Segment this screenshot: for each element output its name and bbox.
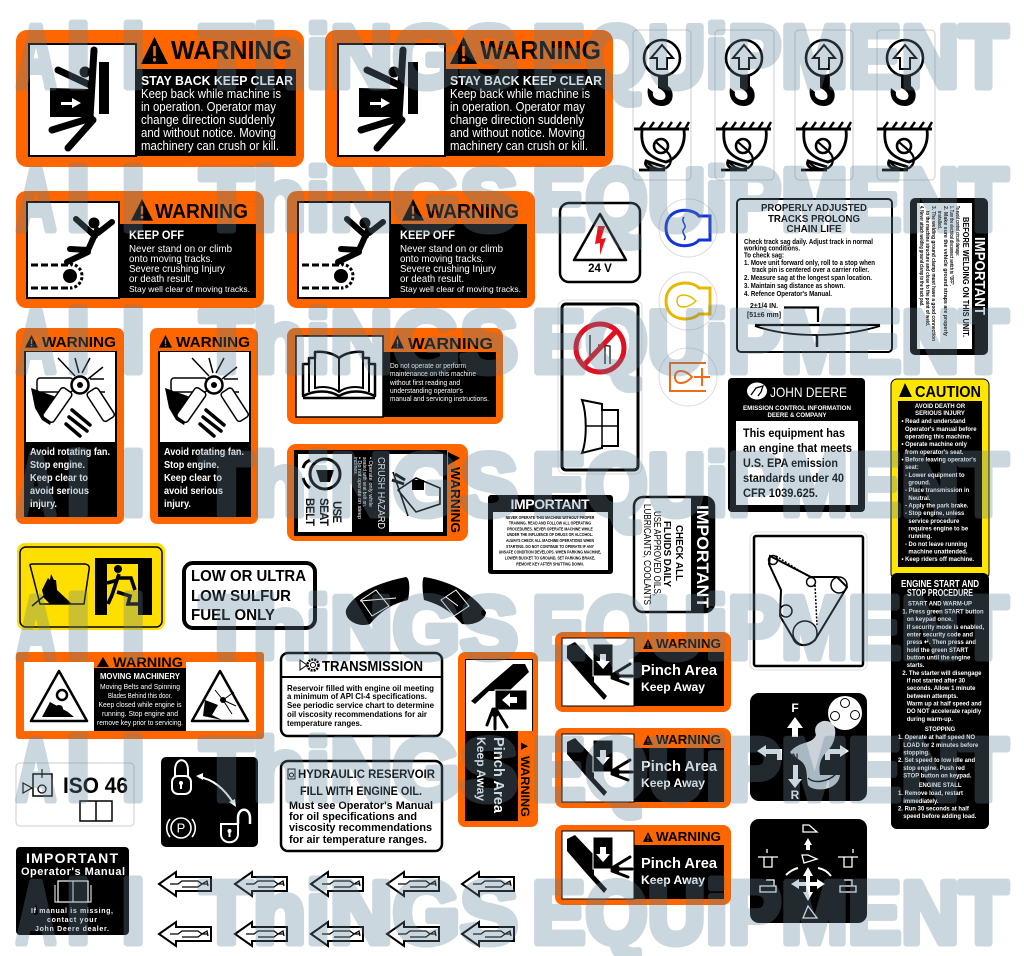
- decal: John Deere emission: EMISSION CONTROL INFORMATION: [743, 405, 851, 412]
- decal: track chain life: TRACKS PROLONG: [768, 213, 860, 225]
- decal: hydraulic reservoir: FILL WITH ENGINE OIL.: [300, 786, 422, 798]
- decal: track chain life: CHAIN LIFE: [786, 223, 842, 235]
- decal: caution panel and engine start procedure: 1. Operate at half speed NO: [898, 734, 975, 741]
- decal: stay back warning 2: and without notice. Moving: [450, 126, 585, 140]
- decal: stay back warning 2: STAY BACK KEEP CLEAR: [450, 73, 603, 88]
- decal: caution panel and engine start procedure: hold the green START: [907, 647, 968, 654]
- decal: stay back warning 2: change direction suddenly: [450, 113, 585, 127]
- decal: rotating fan warning 2: avoid serious: [164, 485, 223, 497]
- decal: stay back warning 1: machinery can crush or kill.: [141, 139, 279, 153]
- decal: pinch warning vertical: Pinch Area: [490, 737, 506, 814]
- decal: crush hazard seat belt warning: inclines.: [352, 457, 358, 475]
- decal: important operating instructions: [488, 495, 613, 574]
- decal: stay back warning 1: WARNING: [171, 35, 292, 65]
- decal: moving machinery warning: Blades Behind this door.: [108, 691, 172, 700]
- decal: caution panel and engine start procedure: ENGINE STALL: [919, 782, 962, 789]
- decal: caution panel and engine start procedure: SERIOUS INJURY: [915, 410, 966, 417]
- decal: crush hazard seat belt warning: • Operate only while: [367, 457, 373, 507]
- decal: caution panel and engine start procedure: • Operate machine only: [901, 441, 967, 448]
- decal: caution panel and engine start procedure: stop engine. Push red: [903, 765, 965, 772]
- decal: important operator's manual: [16, 847, 129, 935]
- decal: lock and park icons: P: [177, 820, 185, 836]
- decals: hook and knot stickers: [633, 30, 935, 180]
- decal: keep off warning 1: [16, 191, 264, 308]
- decal: caution panel and engine start procedure: STOPPING: [925, 726, 955, 733]
- decal: moving machinery warning: remove key prior to servicing.: [97, 718, 183, 727]
- decal: track chain life: working conditions.: [743, 244, 800, 252]
- decal: lock and park icons: [161, 757, 258, 847]
- decal: read manual warning: WARNING: [408, 336, 493, 353]
- decal: joystick pattern: F: [791, 701, 799, 715]
- decal: important operating instructions: UNDER THE INFLUENCE OF DRUGS OR ALCOHOL.: [507, 531, 593, 537]
- decal: read manual warning: maintenance on this machine: [390, 369, 476, 378]
- decal: keep off warning 1: or death result.: [129, 273, 193, 285]
- decal: caution panel and engine start procedure: requires engine to be: [908, 525, 969, 533]
- decal: caution panel and engine start procedure: machine unattended.: [908, 548, 968, 556]
- decal: read manual warning: Do not operate or perform: [390, 361, 466, 370]
- decal: caution panel and engine start procedure: speed before adding load.: [903, 813, 977, 820]
- decal: caution panel and engine start procedure: immediately.: [903, 798, 939, 805]
- decal: 24 V electrical hazard: [560, 203, 640, 282]
- decal: caution panel and engine start procedure: AVOID DEATH OR: [915, 403, 966, 410]
- decal: yellow emergency exit: [17, 543, 165, 630]
- decal: crush hazard seat belt warning: BELT: [303, 498, 315, 526]
- decal: read manual warning: understanding operator's: [390, 386, 463, 395]
- decal: pinch warning 3: WARNING: [656, 829, 721, 844]
- decal: caution panel and engine start procedure: - Apply the park brake.: [905, 502, 969, 510]
- decal: keep off warning 1: onto moving tracks.: [129, 253, 213, 265]
- decal: ISO 46: ISO 46: [63, 773, 128, 798]
- decal: track chain life: [737, 199, 892, 352]
- decal: track chain life: 2. Measure sag at the longest span location.: [744, 273, 872, 282]
- decal: caution panel and engine start procedure: running.: [908, 533, 932, 540]
- decal: keep off warning 2: [287, 191, 535, 308]
- decal: important operating instructions: STARTING. DO NOT CONTINUE TO OPERATE IF ANY: [506, 543, 594, 549]
- decal: John Deere emission: DEERE & COMPANY: [768, 412, 827, 419]
- decal: hydraulic reservoir: HYDRAULIC RESERVOIR: [298, 767, 435, 781]
- decal: caution panel and engine start procedure: if not started after 30: [907, 677, 966, 685]
- decal: pinch warning 1: Keep Away: [641, 680, 705, 694]
- decal: caution panel and engine start procedure: If security mode is enabled,: [907, 624, 984, 631]
- decal: crush hazard seat belt warning: CRUSH HAZARD: [375, 457, 386, 529]
- decal: keep off warning 2: onto moving tracks.: [400, 253, 484, 265]
- decal: stay back warning 1: Keep back while machine is: [141, 87, 281, 101]
- decal: keep off warning 1: Never stand on or climb: [129, 243, 232, 255]
- decal: caution panel and engine start procedure: [891, 379, 989, 829]
- decal: caution panel and engine start procedure: on keypad once.: [907, 616, 953, 623]
- decal: stay back warning 2: Keep back while machine is: [450, 87, 590, 101]
- decal: low sulfur fuel: LOW OR ULTRA: [191, 568, 306, 585]
- decal: caution panel and engine start procedure: CAUTION: [915, 384, 981, 401]
- decal: read manual warning: [287, 328, 503, 424]
- decal: caution panel and engine start procedure: operating this machine.: [905, 433, 971, 441]
- decal: important operator's manual: If manual is missing,: [31, 908, 113, 915]
- decal: stay back warning 1: change direction suddenly: [141, 113, 276, 127]
- decal: keep off warning 2: KEEP OFF: [400, 230, 455, 242]
- decal: track chain life: 4. Refence Operator's Manual.: [744, 289, 832, 298]
- decal: important operating instructions: PROCEDURES. NEVER OPERATE MACHINE WHILE: [507, 526, 593, 532]
- decal: caution panel and engine start procedure: stopping.: [903, 749, 930, 757]
- decal: pinch warning 1: [555, 632, 731, 712]
- decal: belt routing: [750, 532, 867, 670]
- decal: track chain life: track pin is centered over a carrier roller.: [752, 265, 869, 274]
- decal: joystick pattern: N: [792, 752, 798, 762]
- decal: rotating fan warning 1: [16, 328, 124, 524]
- decal: caution panel and engine start procedure: press ↵. Then press and: [907, 639, 976, 646]
- decal: important operating instructions: REMOVE KEY AFTER SHUTTING DOWN.: [516, 561, 584, 567]
- decal: caution panel and engine start procedure: 1. Remove load, restart: [898, 790, 964, 797]
- decal: low sulfur fuel: LOW SULFUR: [191, 588, 291, 605]
- decal: stay back warning 1: in operation. Operator may: [141, 100, 277, 114]
- decal: caution panel and engine start procedure: seat:: [905, 464, 919, 471]
- decal: important operator's manual: IMPORTANT: [26, 850, 118, 866]
- decal: John Deere emission: an engine that meets: [743, 443, 852, 455]
- decal: hydraulic reservoir: viscosity recommendations: [289, 822, 432, 834]
- icon: yellow bulb: [659, 272, 717, 330]
- decal: important operator's manual: John Deere dealer.: [35, 926, 109, 933]
- decal: caution panel and engine start procedure: - Do not leave running: [905, 541, 967, 548]
- decal: rotating fan warning 2: Avoid rotating fan.: [164, 446, 244, 458]
- decal: John Deere emission: CFR 1039.625.: [743, 488, 818, 500]
- decal: important operating instructions: NEVER OPERATE THIS MACHINE WITHOUT PROPER: [506, 514, 594, 520]
- decal: caution panel and engine start procedure: during warm-up.: [907, 716, 953, 723]
- decal: pinch warning vertical: Keep Away: [474, 737, 488, 801]
- decal: ISO 46: [16, 763, 134, 826]
- decal: caution panel and engine start procedure: from operator's seat.: [905, 449, 964, 456]
- decal: caution panel and engine start procedure: 1. Press green START button: [902, 608, 984, 616]
- decal: keep off warning 2: Stay well clear of moving tracks.: [400, 284, 521, 294]
- decal: pinch warning 1: WARNING: [656, 636, 721, 651]
- icon: orange glow plug: [659, 348, 717, 406]
- decal: crush hazard seat belt warning: USE: [330, 501, 342, 523]
- decal: before welding important: 3. The welding ground clamp must have a good connection: [930, 206, 936, 342]
- decal: read manual warning: manual and servicing instructions.: [390, 394, 489, 403]
- decal: check all fluids: [634, 497, 714, 612]
- decal: track chain life: [51±6 mm]: [747, 310, 781, 319]
- decal: keep off warning 2: Never stand on or climb: [400, 243, 503, 255]
- decal: pinch warning 3: Keep Away: [641, 873, 705, 887]
- decal: transmission: [281, 653, 442, 736]
- decal: stay back warning 2: in operation. Operator may: [450, 100, 586, 114]
- decal: transmission: TRANSMISSION: [322, 658, 423, 675]
- decal: check all fluids: IMPORTANT: [693, 505, 711, 608]
- decal: crush hazard seat belt warning: • Do not operate on steep: [356, 457, 362, 519]
- decal: moving machinery warning: WARNING: [113, 655, 183, 670]
- decal: rotating fan warning 1: WARNING: [42, 335, 116, 351]
- decal: stay back warning 1: STAY BACK KEEP CLEAR: [141, 73, 294, 88]
- decal: moving machinery warning: Moving Belts and Spinning: [100, 682, 180, 691]
- decal: track chain life: PROPERLY ADJUSTED: [761, 202, 867, 214]
- decal: keep off warning 2: Severe crushing Injury: [400, 263, 497, 275]
- decal: keep off warning 1: Stay well clear of moving tracks.: [129, 284, 250, 294]
- decal: transmission: Reservoir filled with engine oil meeting: [287, 684, 434, 693]
- decal: check all fluids: FLUIDS DAILY: [661, 521, 673, 587]
- decal: caution panel and engine start procedure: • Read and understand: [901, 418, 966, 425]
- decal: keep off warning 2: or death result.: [400, 273, 464, 285]
- decal: pinch warning 3: Pinch Area: [641, 855, 718, 872]
- decal: caution panel and engine start procedure: ground.: [908, 479, 931, 487]
- decal: pinch warning 2: [555, 728, 731, 808]
- icon: curved switch decals: [346, 577, 486, 625]
- decal: track chain life: Check track sag daily. Adjust track in normal: [744, 237, 873, 246]
- decal: caution panel and engine start procedure: STOP PROCEDURE: [907, 588, 973, 599]
- decal: moving machinery warning: [16, 652, 264, 739]
- decal: before welding important: to the machine structure and close to the point of weld.: [924, 211, 930, 326]
- decal: pinch warning vertical: ▲ WARNING: [518, 740, 532, 817]
- decal: moving machinery warning: MOVING MACHINERY: [100, 672, 181, 681]
- decal: stay back warning 2: WARNING: [480, 35, 601, 65]
- decal: stay back warning 1: and without notice. Moving: [141, 126, 276, 140]
- decal: pinch warning vertical: [458, 652, 538, 827]
- decal: keep off warning 1: WARNING: [155, 201, 248, 223]
- decal: important operating instructions: UNSAFE CONDITION DEVELOPS. WHEN PARKING MACHINE,: [499, 549, 601, 555]
- decal: moving machinery warning: Keep closed while engine is: [98, 700, 182, 709]
- decal: crush hazard seat belt warning: SEAT: [317, 498, 329, 526]
- decal: before welding important: 4. Never attach welding ground clamp to the track pad.: [918, 206, 924, 306]
- decal: keep off warning 2: WARNING: [426, 201, 519, 223]
- decal: caution panel and engine start procedure: • Before leaving operator's: [901, 456, 977, 464]
- decal: rotating fan warning 1: avoid serious: [30, 485, 89, 497]
- decal: before welding important: [910, 198, 988, 355]
- decal: rotating fan warning 2: injury.: [164, 498, 191, 510]
- decal: John Deere emission: standards under 40: [743, 473, 844, 485]
- decal: transmission: oil viscosity recommendations for air: [287, 710, 428, 719]
- decal: crush hazard seat belt warning: [287, 444, 468, 541]
- decal: stay back warning 1: [16, 30, 304, 167]
- decal: rotating fan warning 1: injury.: [30, 498, 57, 510]
- decal: transmission: temperature ranges.: [287, 719, 362, 728]
- icons: arrow row 1: [159, 872, 514, 896]
- decal: important operating instructions: ALWAYS CHECK ALL MACHINE OPERATIONS WHEN: [506, 537, 594, 543]
- decal: pinch warning 3: [555, 825, 731, 905]
- decal: hydraulic reservoir: for air temperature ranges.: [289, 834, 427, 846]
- decal: hydraulic reservoir: for oil specifications and: [289, 811, 417, 823]
- decal: joystick pattern: R: [791, 788, 800, 802]
- decal: caution panel and engine start procedure: • Keep riders off machine.: [901, 556, 974, 563]
- icon: blue bulb: [659, 199, 717, 257]
- decal: important operator's manual: contact your: [47, 917, 97, 924]
- decal: rotating fan warning 2: Stop engine.: [164, 459, 219, 471]
- decal: caution panel and engine start procedure: - Lower equipment to: [905, 472, 965, 479]
- decal: crush hazard seat belt warning: seated with seat belt on.: [361, 457, 367, 507]
- decal: track chain life: To check sag:: [744, 250, 784, 260]
- decal: important operating instructions: IMPORTANT: [510, 496, 590, 512]
- decal: rotating fan warning 2: Keep clear to: [164, 472, 222, 484]
- decal: caution panel and engine start procedure: 2. Set speed to low idle and: [898, 757, 975, 764]
- icons: arrow row 2: [159, 922, 514, 946]
- decal: caution panel and engine start procedure: button until the engine: [907, 654, 971, 662]
- decal: track chain life: 2±1/4 IN.: [750, 301, 778, 310]
- decal: hydraulic reservoir: [281, 761, 442, 851]
- decal: important operator's manual: Operator's Manual: [21, 866, 125, 878]
- decal: pinch warning 2: Pinch Area: [641, 758, 718, 775]
- decal: caution panel and engine start procedure: between attempts.: [907, 693, 958, 700]
- decal: hydraulic reservoir: Must see Operator's Manual: [289, 800, 433, 812]
- decal: caution panel and engine start procedure: 2. Run 30 seconds at half: [898, 805, 970, 813]
- decal: John Deere emission: JOHN DEERE: [770, 384, 847, 400]
- decal: rotating fan warning 1: Stop engine.: [30, 459, 85, 471]
- decal: 24 V electrical hazard: 24 V: [588, 263, 612, 275]
- decal: before welding important: 1. Turn the electrical disconnect switch to "OFF".: [948, 206, 954, 286]
- decal: crush hazard seat belt warning: WARNING: [448, 467, 462, 533]
- decal: pinch warning 1: Pinch Area: [641, 662, 718, 679]
- decal: caution panel and engine start procedure: - Place transmission in: [905, 487, 969, 494]
- decal: caution panel and engine start procedure: STOP button on keypad.: [903, 772, 972, 780]
- decal: caution panel and engine start procedure: - Stop engine, unless: [905, 510, 965, 517]
- decal: John Deere emission: This equipment has: [743, 428, 845, 440]
- decal: track chain life: 1. Move unit forward only, roll to a stop when: [744, 258, 875, 267]
- decal: low sulfur fuel: FUEL ONLY: [191, 607, 275, 624]
- decal: check all fluids: USE APPROVED OILS,: [651, 511, 662, 596]
- decal: low sulfur fuel: [184, 563, 315, 628]
- decal: before welding important: 2. Make sure the vehicle ground straps are properly: [942, 206, 948, 337]
- decal: transmission: See periodic service chart to determine: [287, 701, 434, 710]
- decal: rotating fan warning 1: Avoid rotating fan.: [30, 446, 110, 458]
- decal: no spray and book: [558, 300, 642, 474]
- decal: caution panel and engine start procedure: ENGINE START AND: [901, 579, 979, 590]
- decal: John Deere emission: U.S. EPA emission: [743, 458, 838, 470]
- decal: read manual warning: without first reading and: [389, 378, 460, 387]
- decal: caution panel and engine start procedure: 2. The starter will disengage: [902, 670, 982, 677]
- decal: joystick pattern: [750, 693, 867, 802]
- decal: check all fluids: LUBRICANTS, COOLANTS: [641, 504, 652, 605]
- decal: rotating fan warning 2: WARNING: [176, 335, 250, 351]
- decal: excavator control pattern: [750, 819, 867, 923]
- decal: stay back warning 2: machinery can crush or kill.: [450, 139, 588, 153]
- decal: moving machinery warning: running. Stop engine and: [102, 709, 178, 718]
- decal: caution panel and engine start procedure: Neutral.: [908, 495, 931, 502]
- decal: check all fluids: CHECK ALL: [673, 525, 685, 582]
- decal: stay back warning 2: [325, 30, 613, 167]
- decal: caution panel and engine start procedure: LOAD for 2 minutes before: [903, 742, 979, 749]
- decal: caution panel and engine start procedure: Warm up at half speed and: [907, 700, 982, 708]
- decal: important operating instructions: TRAINING. READ AND FOLLOW ALL OPERATING: [509, 520, 591, 526]
- decal: important operating instructions: LOWER BUCKET TO GROUND, SET PARKING BRAKE,: [505, 555, 595, 561]
- decal: before welding important: To avoid control circuit damage:: [954, 206, 960, 256]
- decal: pinch warning 2: WARNING: [656, 732, 721, 747]
- decal: before welding important: IMPORTANT: [971, 237, 987, 315]
- decal: caution panel and engine start procedure: starts.: [907, 662, 925, 669]
- decal: transmission: a minimum of API CI-4 specifications.: [287, 692, 427, 701]
- decal: caution panel and engine start procedure: enter security code and: [907, 631, 973, 639]
- decal: rotating fan warning 2: [150, 328, 258, 524]
- decal: before welding important: BEFORE WELDING ON THIS UNIT.: [961, 217, 970, 337]
- decal: before welding important: installed.: [936, 211, 942, 229]
- decal: caution panel and engine start procedure: DO NOT accelerate rapidly: [907, 708, 982, 715]
- decal: caution panel and engine start procedure: START AND WARM-UP: [908, 600, 973, 608]
- decal: rotating fan warning 1: Keep clear to: [30, 472, 88, 484]
- decal: keep off warning 1: KEEP OFF: [129, 230, 184, 242]
- decal: John Deere emission: [728, 378, 865, 512]
- decal: track chain life: 3. Maintain sag distance as shown.: [744, 281, 845, 290]
- decal: caution panel and engine start procedure: seconds. Allow 1 minute: [907, 685, 976, 692]
- decal: pinch warning 2: Keep Away: [641, 776, 705, 790]
- decal: keep off warning 1: Severe crushing Injury: [129, 263, 226, 275]
- decal: caution panel and engine start procedure: Operator's manual before: [905, 426, 977, 433]
- decal: caution panel and engine start procedure: service procedure: [908, 518, 960, 525]
